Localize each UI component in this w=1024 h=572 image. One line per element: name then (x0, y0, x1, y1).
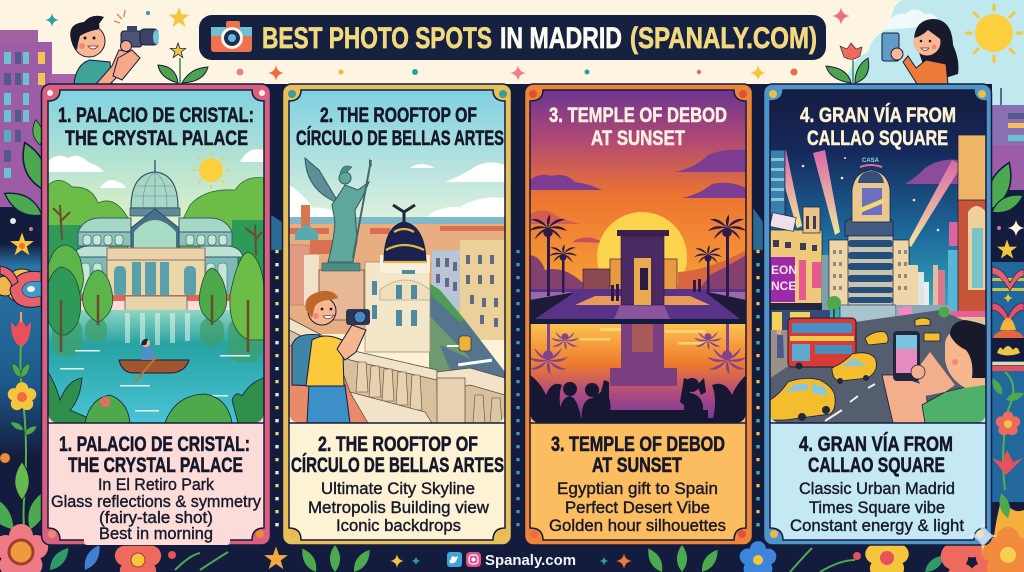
panel: card 1 Palacio de Cristal (42, 84, 270, 545)
card 2 caption (291, 433, 504, 535)
bottom-left flower cluster (0, 524, 421, 572)
card 1 top heading: 1. PALACIO DE CRISTAL: (58, 104, 254, 127)
gallery lights between cards (277, 250, 758, 535)
scene: Gran Via street with Capitol building (770, 90, 988, 423)
card 4 caption (790, 433, 964, 535)
panel: card 2 Circulo de Bellas Artes (282, 84, 512, 545)
card 1 top heading (58, 104, 254, 150)
card 2 caption: CÍRCULO DE BELLAS ARTES (291, 454, 504, 477)
card 1 caption: Best in morning (99, 525, 213, 543)
decorative stars and sparkles in header area (45, 7, 850, 81)
panel: card 3 Temple of Debod (524, 84, 752, 545)
card 4 top heading: CALLAO SQUARE (807, 127, 948, 150)
icon: sun top right (966, 5, 1022, 62)
card 2 caption: 2. THE ROOFTOP OF (318, 433, 478, 456)
left column folk-art florals (0, 119, 53, 550)
footer social handle (447, 552, 576, 569)
card 3 top heading (549, 104, 727, 150)
card 3 caption: Perfect Desert Vibe (565, 499, 710, 517)
yellow taxis (770, 318, 940, 420)
plants above cards (158, 43, 869, 83)
card 4 caption: Times Square vibe (809, 499, 945, 517)
card 2 top heading: CÍRCULO DE BELLAS ARTES (296, 127, 504, 150)
card 3 top heading: AT SUNSET (591, 127, 685, 150)
title banner: (SPANALY.COM) (630, 22, 817, 55)
card 2 caption: Iconic backdrops (336, 517, 461, 535)
card 1 caption: THE CRYSTAL PALACE (68, 454, 243, 477)
card 3 caption: AT SUNSET (592, 454, 682, 477)
card 3 caption: Egyptian gift to Spain (557, 480, 718, 498)
card 1 caption: In El Retiro Park (98, 476, 215, 494)
card 3 caption (549, 433, 726, 535)
card 1 caption: Glass reflections & symmetry (51, 493, 262, 511)
bottom-right decorations (600, 498, 1024, 572)
scene: rooftop with statue and Metropolis dome (289, 90, 505, 425)
icon: camera (211, 21, 252, 52)
card 1 top heading: THE CRYSTAL PALACE (65, 127, 248, 150)
card 2 caption: Ultimate City Skyline (321, 480, 475, 498)
scene: Gran Via street with Capitol building: NCE (771, 279, 796, 293)
card 3 caption: Golden hour silhouettes (549, 517, 726, 535)
card 4 top heading: 4. GRAN VÍA FROM (800, 104, 956, 127)
scene: crystal palace and lake (45, 90, 264, 423)
right purple city building (992, 88, 1024, 190)
card 4 caption: Classic Urban Madrid (799, 480, 955, 498)
woman with phone, top right (882, 19, 958, 84)
card 2 top heading (296, 104, 504, 150)
scene: temple at sunset with reflection (528, 90, 747, 423)
red double-decker bus (788, 318, 856, 370)
panel: card 4 Gran Via (764, 84, 992, 545)
footer social handle: Spanaly.com (485, 553, 576, 569)
watermark sparkle over card 4 corner (968, 521, 998, 551)
photographer with camera, top left (70, 10, 159, 84)
card 4 top heading (800, 104, 956, 150)
title banner: BEST PHOTO SPOTS (262, 22, 492, 55)
icon: instagram (466, 552, 481, 567)
right column folk-art florals (981, 159, 1024, 519)
card 4 caption: 4. GRAN VÍA FROM (799, 433, 953, 456)
card 2 top heading: 2. THE ROOFTOP OF (320, 104, 477, 127)
card 2 caption: Metropolis Building view (308, 499, 489, 517)
title banner: IN MADRID (500, 22, 622, 55)
scene: Gran Via street with Capitol building: CASA (862, 158, 880, 164)
card 4 caption: CALLAO SQUARE (808, 454, 945, 477)
icon: twitter (447, 552, 462, 567)
card 4 caption: Constant energy & light (790, 517, 964, 535)
title banner (199, 15, 826, 60)
card 1 caption: 1. PALACIO DE CRISTAL: (59, 433, 250, 456)
card 3 top heading: 3. TEMPLE OF DEBOD (549, 104, 727, 127)
card 1 caption: (fairy-tale shot) (99, 509, 213, 527)
card 3 caption: 3. TEMPLE OF DEBOD (551, 433, 725, 456)
scene: Gran Via street with Capitol building: EON (771, 263, 797, 277)
left purple city building (0, 30, 80, 207)
card 1 caption (51, 433, 262, 543)
